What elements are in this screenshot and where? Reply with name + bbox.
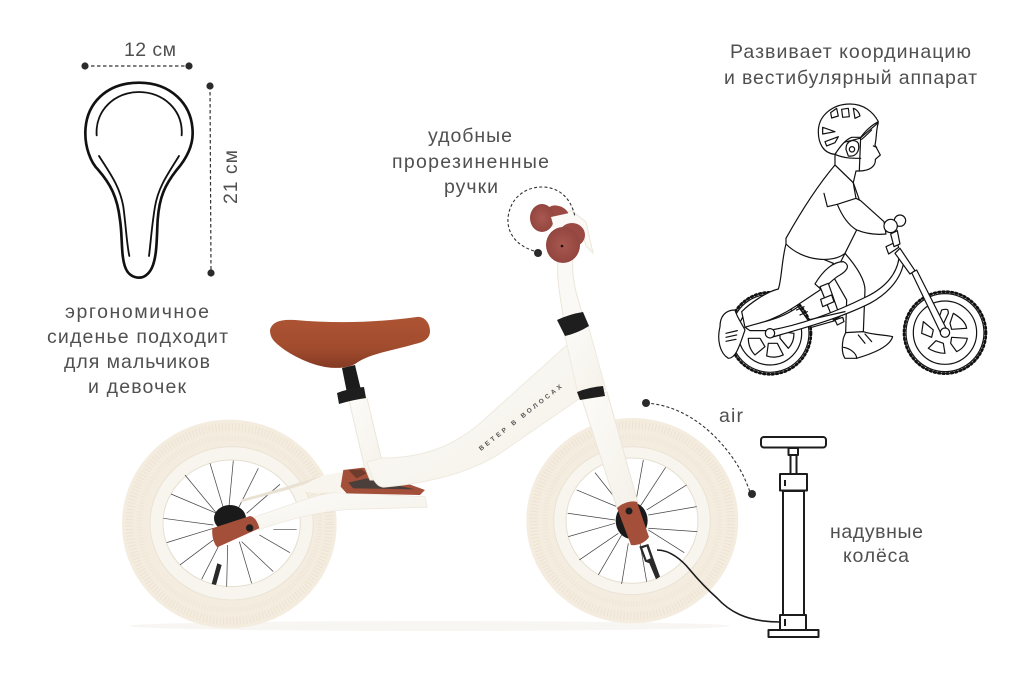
ground shadow [130, 621, 730, 631]
child figure [719, 104, 906, 358]
text block: ergonomic seat [47, 301, 228, 398]
text block: handlebar grips [392, 125, 549, 198]
lower rear fork [255, 493, 427, 530]
icon: air pump [761, 437, 826, 637]
icon: rear wheel line drawing [729, 292, 811, 374]
seat clamp [337, 387, 366, 404]
rear wheel [122, 420, 427, 628]
heading: seat length 21 cm: 21 см [220, 150, 242, 204]
torso with shirt [786, 165, 860, 259]
text block: ergonomic seat: для мальчиков [64, 351, 210, 373]
text block: handlebar grips: прорезиненные [392, 151, 549, 173]
text block: coordination heading [724, 41, 977, 89]
upper rear stay [240, 473, 340, 503]
hub [214, 505, 246, 532]
front wheel [526, 418, 738, 623]
illustration: child riding balance bike [719, 104, 986, 374]
text block: inflatable wheels [830, 521, 923, 567]
text block: handlebar grips: удобные [428, 125, 512, 147]
text block: inflatable wheels: колёса [843, 545, 909, 567]
heading: seat width 12 cm: 12 см [124, 39, 176, 61]
saddle [270, 317, 430, 368]
main frame [367, 344, 586, 487]
illustration: balance bike photo [122, 203, 780, 631]
text block: coordination heading: и вестибулярный аппарат [724, 67, 977, 89]
handlebar with grips [530, 203, 593, 263]
icon: front wheel line drawing [904, 292, 986, 374]
seat tube [349, 398, 386, 480]
dimension line: seat length [206, 82, 215, 277]
text block: handlebar grips: ручки [444, 176, 498, 198]
front axle bolt [626, 508, 632, 514]
front fork [581, 392, 638, 508]
head tube [564, 325, 606, 394]
valve [639, 544, 660, 579]
text block: coordination heading: Развивает координацию [730, 41, 971, 63]
text block: ergonomic seat: сиденье подходит [47, 326, 228, 348]
callout: dashed arc for air [642, 399, 756, 498]
footrest [341, 468, 425, 495]
text block: inflatable wheels: надувные [830, 521, 923, 543]
callout: dashed arc around grips [508, 187, 575, 257]
icon: seat top view outline [85, 83, 193, 278]
sleeve and arm [824, 193, 886, 234]
front hub plate [617, 501, 649, 545]
label: air: air [719, 405, 744, 427]
hub plate [212, 516, 259, 547]
bike frame line drawing [765, 231, 950, 338]
front leg [833, 253, 865, 333]
upper headset clamp [557, 312, 589, 336]
valve [212, 563, 222, 585]
text block: ergonomic seat: эргономичное [65, 301, 209, 323]
rear leg [742, 244, 833, 327]
dimension line: seat width [81, 62, 193, 70]
lower headset clamp [577, 386, 605, 400]
head [835, 123, 880, 183]
seat post [342, 365, 361, 393]
frame logo: ВЕТЕР В ВОЛОСАХ [478, 383, 564, 453]
handlebar stem [558, 256, 583, 322]
hose [657, 550, 780, 622]
text block: ergonomic seat: и девочек [88, 376, 186, 398]
